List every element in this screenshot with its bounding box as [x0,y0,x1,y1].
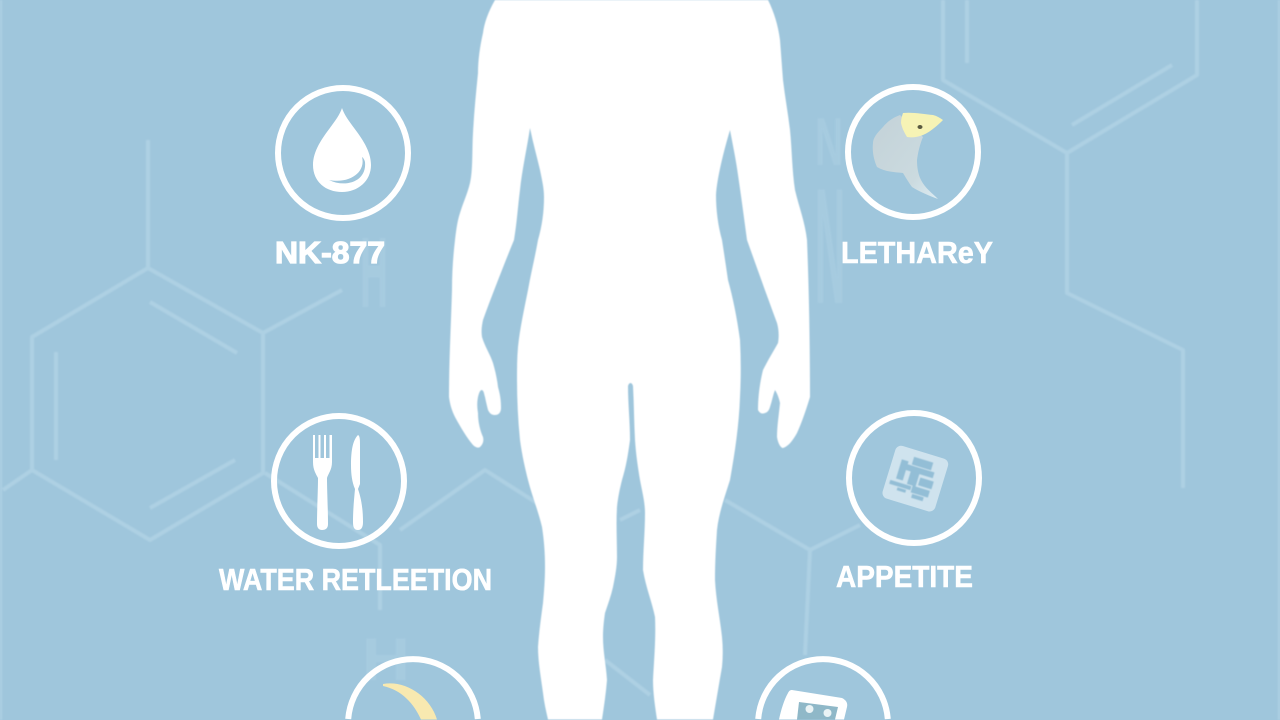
icon: crescent moon [383,683,437,720]
symptom: water retention [219,416,492,597]
human body silhouette [449,0,810,720]
icon ring: crescent [348,659,478,719]
icon: tablet screen [779,690,847,720]
symptom: bottom left crescent [348,659,478,720]
symptom: NK-877 [275,88,408,270]
label: appetite: APPETITE [836,559,973,594]
icon ring: tablet [758,659,888,719]
label: water retention: WATER RETLEETION [219,562,492,597]
faint atom letters: H [362,626,410,693]
icon: fork and knife [313,435,363,530]
icon ring: cutlery [274,416,404,546]
icon: water drop [313,108,371,192]
icon ring: liver [848,87,978,217]
symptom: appetite [836,413,979,594]
icon ring: appetite [849,413,979,543]
symptom: lethargy [841,87,993,270]
icon: rotated square tablet [881,444,950,513]
faint atom letters: H [360,217,388,329]
faint atom letters: N [815,104,843,180]
label: NK-877: NK-877 [275,235,385,270]
label: lethargy: LETHAReY [841,235,993,270]
faint atom letters [360,104,845,693]
symptom: bottom right tablet [758,659,888,720]
icon ring: water drop [278,88,408,218]
text: N [815,154,845,338]
icon: liver [873,113,943,199]
